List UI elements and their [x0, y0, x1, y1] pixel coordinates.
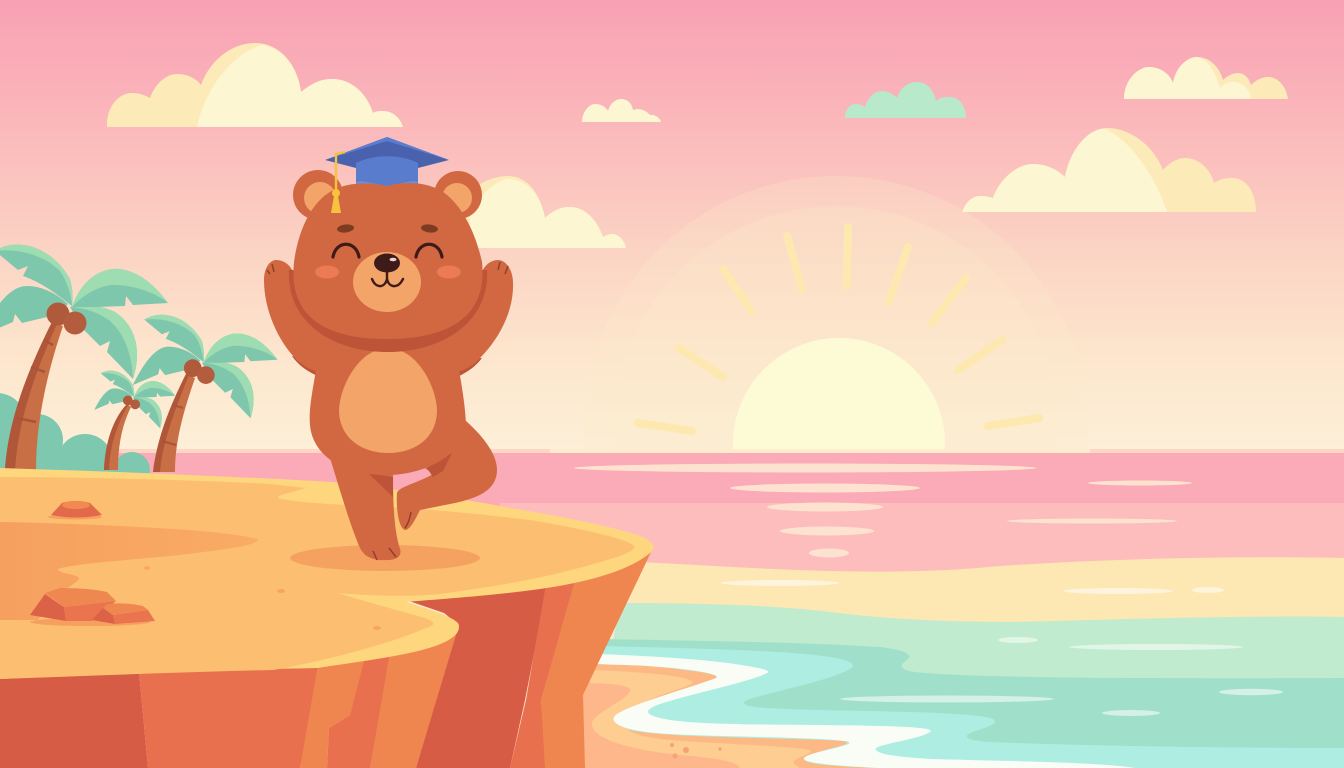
water highlights — [721, 580, 1283, 716]
nose — [374, 254, 400, 272]
palm tree: large — [0, 245, 168, 470]
teal water — [590, 639, 1344, 768]
graduation cap base — [356, 160, 418, 190]
eyebrows — [337, 224, 438, 233]
background: sky gradient — [0, 0, 1344, 460]
rock: small far — [48, 501, 102, 520]
cliff top sand rim — [0, 468, 653, 679]
cliff top sand surface — [0, 477, 634, 679]
cliff face — [0, 550, 652, 768]
left arm — [264, 260, 345, 377]
cloud: top right — [1124, 57, 1288, 99]
sun — [733, 338, 945, 449]
ear left — [293, 170, 343, 220]
cloud: large right — [962, 128, 1256, 212]
happy eyes — [333, 244, 442, 257]
ear right — [434, 171, 482, 219]
sea reflections — [574, 464, 1192, 558]
graduation cap board — [325, 137, 449, 182]
bear — [264, 137, 513, 560]
cloud: small top centre — [582, 99, 661, 122]
aqua water — [590, 646, 1344, 768]
smile — [372, 272, 403, 286]
pebbles — [144, 566, 381, 630]
bear ground shadow — [290, 545, 480, 571]
white foam line — [597, 654, 1135, 768]
mint water — [590, 603, 1344, 768]
cloud: mint — [845, 82, 966, 118]
cheeks — [315, 266, 461, 278]
lower beach sand — [580, 660, 880, 768]
bent leg — [397, 420, 497, 530]
head shadow band — [289, 270, 487, 352]
cloud: large top left — [107, 43, 403, 127]
muzzle — [353, 252, 421, 312]
sun rays — [638, 227, 1039, 431]
right arm — [430, 260, 513, 377]
pale shallow sand band — [620, 557, 1344, 640]
palm tree: medium — [133, 315, 277, 472]
sea — [118, 449, 1344, 573]
body — [310, 320, 466, 475]
sun glow halos — [584, 176, 1088, 680]
head — [293, 183, 483, 339]
belly — [339, 348, 437, 453]
palm tree: tiny — [94, 371, 175, 470]
bushes behind palms — [0, 393, 150, 490]
rock: large pair — [30, 588, 155, 626]
sand shadow patch — [0, 522, 258, 620]
cap tassel — [331, 152, 345, 213]
cloud: behind bear — [450, 176, 626, 248]
standing leg — [330, 458, 400, 560]
